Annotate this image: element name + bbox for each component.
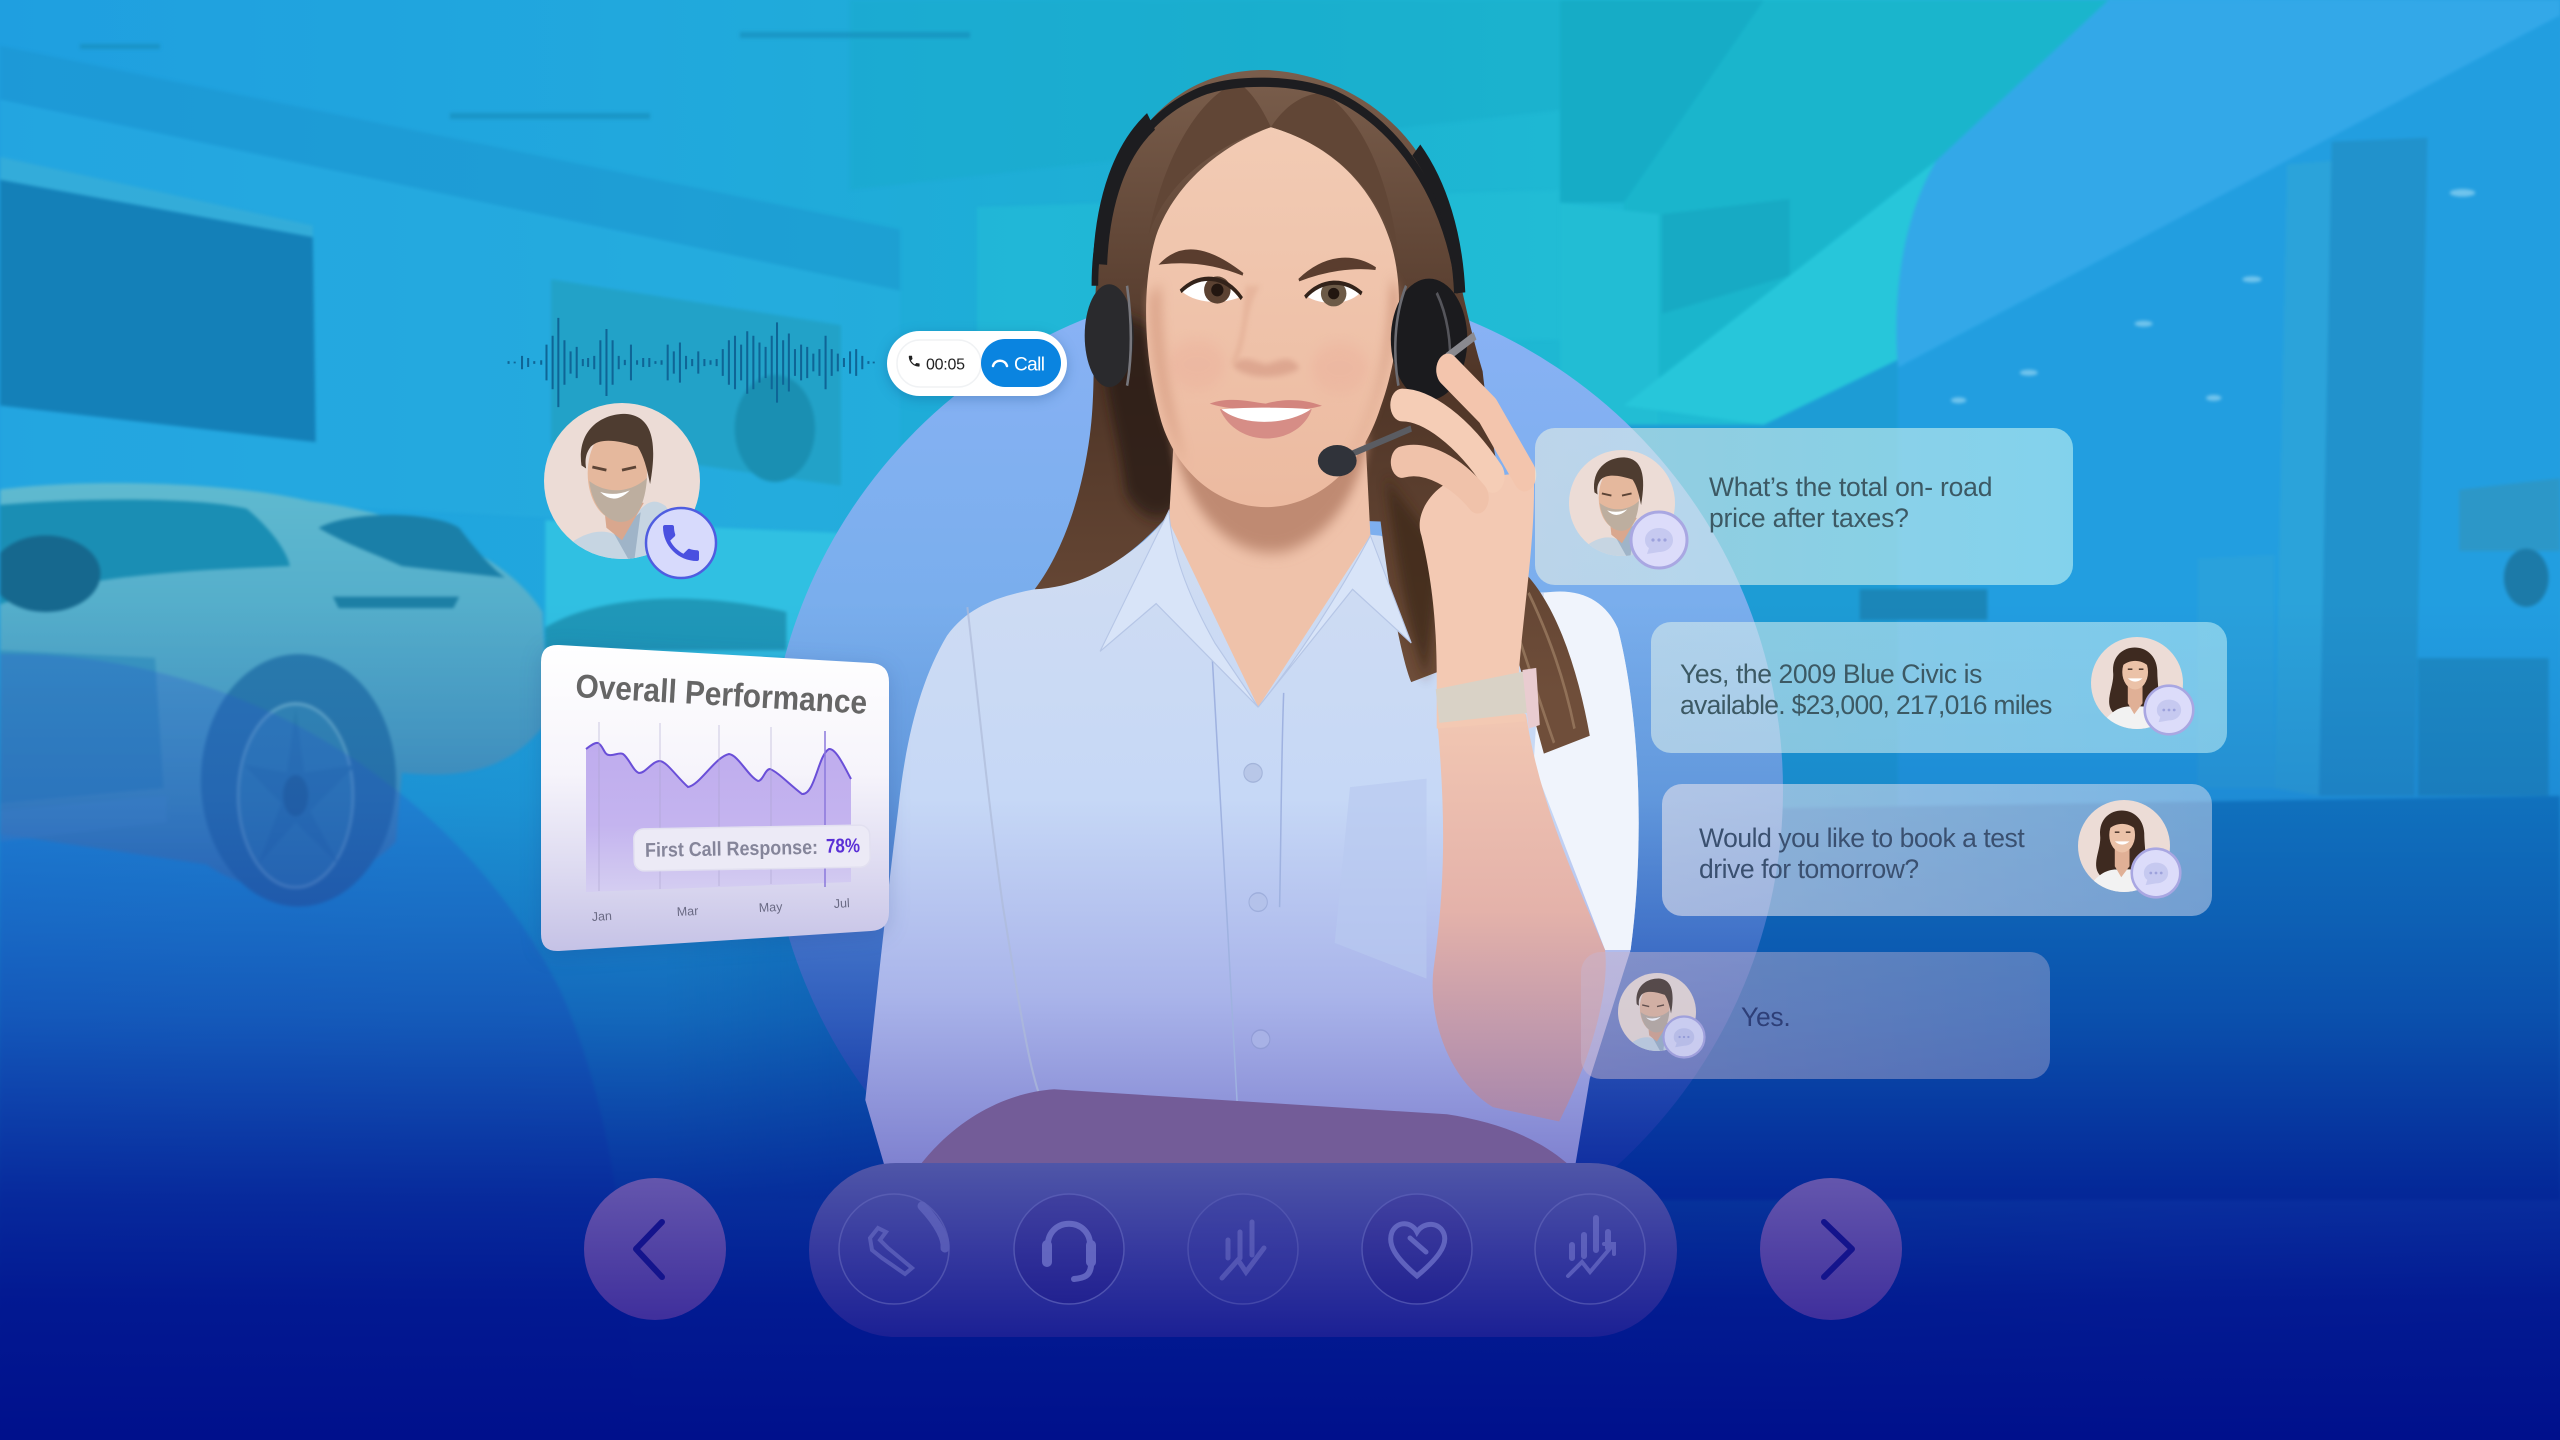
heading: Overall Performance [575, 667, 868, 721]
icon: wrench [839, 1194, 949, 1304]
microphone boom [1347, 429, 1411, 456]
buttons [1244, 764, 1262, 782]
icon: headset [1014, 1194, 1124, 1304]
wave shape lower left [0, 654, 632, 1440]
message text [1699, 823, 2025, 884]
headset [1095, 82, 1460, 293]
call status pill: Call [1014, 354, 1045, 376]
icon: phone [909, 356, 920, 367]
message text [1709, 472, 1992, 533]
arm [1433, 714, 1606, 1121]
hair [1035, 70, 1590, 754]
month labels [591, 896, 850, 924]
message text: available. $23,000, 217,016 miles [1680, 690, 2052, 720]
message text: drive for tomorrow? [1699, 854, 1919, 884]
tooltip: first call response: 78% [826, 835, 860, 858]
customer avatar [1618, 973, 1706, 1059]
icon: bar chart with trend [1188, 1194, 1298, 1304]
icon: growth chart [1535, 1194, 1645, 1304]
message text [1680, 659, 2052, 720]
customer avatar [1569, 450, 1688, 570]
icon: phone handset [663, 525, 699, 561]
shirt [865, 514, 1639, 1170]
month labels: Mar [676, 904, 699, 919]
watch [1436, 671, 1529, 723]
previous button [584, 1178, 726, 1320]
message text: Would you like to book a test [1699, 823, 2024, 853]
month labels: Jan [591, 909, 612, 924]
collar [1100, 511, 1258, 707]
message text: What’s the total on- road [1709, 472, 1992, 502]
month labels: Jul [833, 896, 850, 911]
nose and mouth [1233, 359, 1300, 377]
eyes and brows [1162, 251, 1243, 274]
icon: hang up [993, 361, 1007, 366]
icon tray [809, 1163, 1677, 1337]
face [1146, 127, 1399, 507]
month labels: May [758, 900, 783, 915]
chat bubble: agent answers availability [1651, 622, 2227, 753]
message text: price after taxes? [1709, 503, 1909, 533]
agent avatar [2078, 800, 2182, 899]
message text: Yes. [1741, 1002, 1790, 1032]
tooltip: first call response: First Call Response: [645, 837, 818, 862]
message text: Yes, the 2009 Blue Civic is [1680, 659, 1982, 689]
chat bubble: customer confirms [1581, 952, 2050, 1079]
chat bubble: customer asks price [1535, 428, 2073, 585]
call status pill: 00:05 [926, 356, 965, 374]
neck [1169, 436, 1370, 707]
area chart [586, 722, 851, 892]
agent avatar [2091, 637, 2194, 736]
chat bubble: agent offers test drive [1662, 784, 2212, 916]
tooltip: first call response [634, 825, 870, 871]
next button [1760, 1178, 1902, 1320]
icon: heart [1362, 1194, 1472, 1304]
crossed forearm [916, 1089, 1574, 1170]
